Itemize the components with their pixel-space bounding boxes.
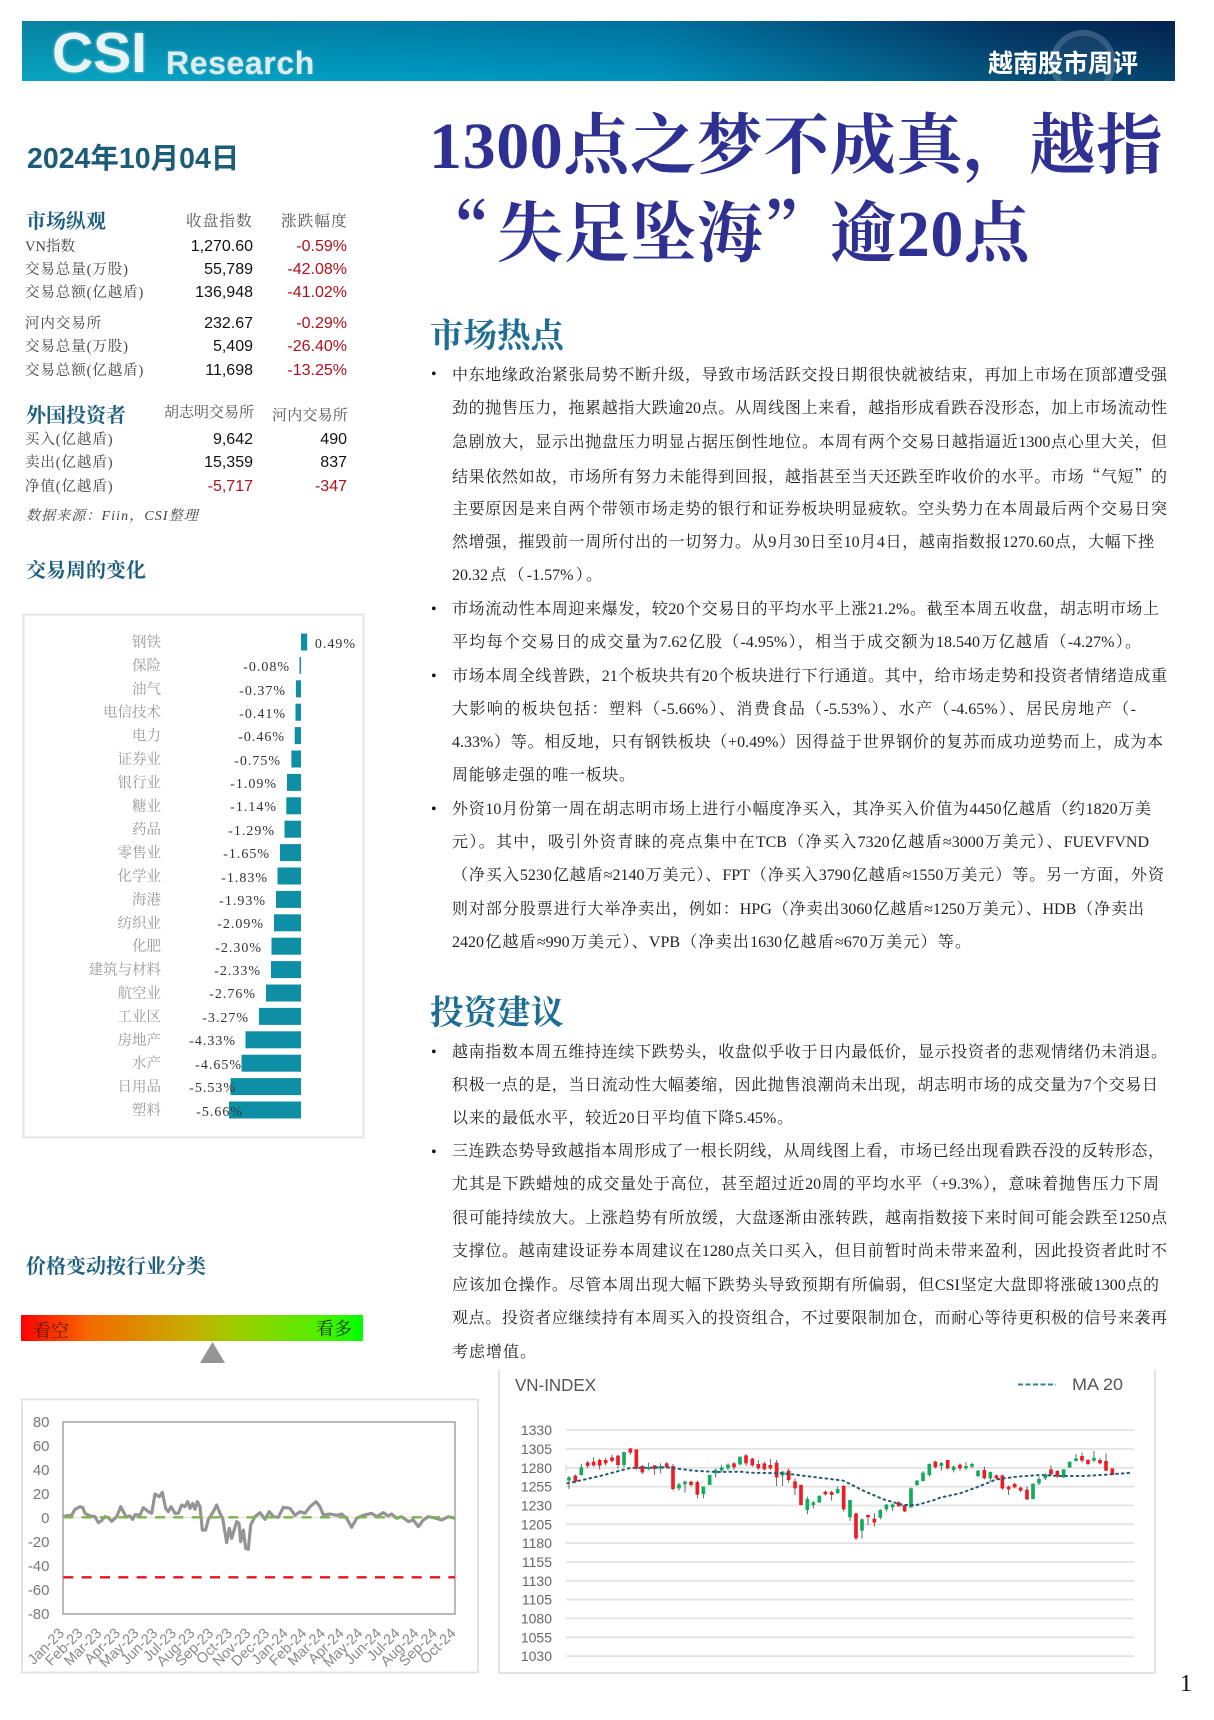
x axis month labels: Jan-24 xyxy=(249,1626,292,1668)
bullet 1: • xyxy=(431,366,437,383)
logo Research: Research xyxy=(166,45,315,81)
value labels: -2.30% xyxy=(215,941,262,956)
text block: investment advice: 三连跌态势导致越指本周形成了一根长阴线，从周线图上看，市场已经出现看跌吞没的反转形态， xyxy=(452,1143,1164,1160)
y axis labels: -40 xyxy=(28,1558,50,1575)
MA 20 line xyxy=(567,1467,1132,1505)
market overview table: VN指数 xyxy=(25,239,75,255)
text block: investment advice: 积极一点的是，当日流动性大幅萎缩，因此抛售浪潮尚未出现，胡志明市场的成交量为7个交易日 xyxy=(452,1077,1158,1094)
text block: market hot spots: 4.33%）等。相反地，只有钢铁板块（+0.49%）因得益于世界钢价的复苏而成功逆势而上，成为本 xyxy=(452,734,1163,751)
text block: market hot spots: 则对部分股票进行大举净卖出，例如：HPG（净卖出3060亿越盾≈1250万美元）、HDB（净卖出 xyxy=(452,901,1144,918)
text block: investment advice: 以来的最低水平，较近20日平均值下降5.45%。 xyxy=(452,1110,793,1127)
market overview table: -26.40% xyxy=(287,338,347,355)
y axis labels: 1155 xyxy=(522,1554,552,1570)
market overview table: -13.25% xyxy=(287,362,347,379)
sector labels: 零售业 xyxy=(118,842,161,863)
sector labels: 保险 xyxy=(132,654,161,675)
x axis month labels: Mar-24 xyxy=(285,1626,329,1669)
text block: market hot spots: 然增强，摧毁前一周所付出的一切努力。从9月30日至10月4日，越南指数报1270.60点，大幅下挫 xyxy=(452,534,1154,551)
text block: market hot spots: 市场本周全线普跌，21个板块共有20个板块进行下行通道。其中，给市场走势和投资者情绪造成重 xyxy=(452,668,1167,685)
y axis labels xyxy=(28,1414,50,1623)
text block: investment advice: 越南指数本周五维持连续下跌势头，收盘似乎收于日内最低价，显示投资者的悲观情绪仍未消退。 xyxy=(452,1044,1167,1061)
sector labels: 水产 xyxy=(132,1052,161,1073)
text block: market hot spots: 平均每个交易日的成交量为7.62亿股（-4.95%），相当于成交额为18.540万亿越盾（-4.27%）。 xyxy=(452,634,1141,651)
text block: investment advice: 支撑位。越南建设证券本周建议在1280点关口买入，但目前暂时尚未带来盈利，因此投资者此时不 xyxy=(452,1243,1167,1260)
heading: market overview: 市场纵观 xyxy=(26,205,106,234)
title line 2: “失足坠海”逾20点 xyxy=(424,180,1031,275)
sector labels: 油气 xyxy=(132,678,161,699)
x axis month labels: Aug-23 xyxy=(154,1626,198,1670)
bullet 3: • xyxy=(431,668,437,685)
text block: market hot spots: 主要原因是来自两个带领市场走势的银行和证券板块明显疲软。空头势力在本周最后两个交易日突 xyxy=(452,501,1167,518)
market overview table: 河内交易所 xyxy=(25,316,102,332)
y axis labels: -60 xyxy=(28,1582,50,1599)
market overview table: 交易总量(万股) xyxy=(25,262,129,278)
heading: price change by sector: 价格变动按行业分类 xyxy=(26,1250,206,1279)
x axis month labels: Jan-23 xyxy=(25,1626,68,1668)
sector labels: 药品 xyxy=(132,818,161,839)
sector labels: 电信技术 xyxy=(103,701,161,722)
market overview table: 9,642 xyxy=(213,431,253,448)
heading: market hot spots: 市场热点 xyxy=(430,308,564,357)
bars xyxy=(229,634,307,1118)
market overview table: 136,948 xyxy=(195,284,253,301)
value labels: -1.65% xyxy=(223,847,270,862)
sentiment gauge bar xyxy=(21,1315,363,1341)
y axis labels: 80 xyxy=(33,1414,50,1431)
text block: market hot spots: 市场流动性本周迎来爆发，较20个交易日的平均水平上涨21.2%。截至本周五收盘，胡志明市场上 xyxy=(452,601,1159,618)
y axis labels: 1305 xyxy=(521,1441,552,1457)
y axis labels: 1055 xyxy=(521,1629,552,1645)
market overview table: -0.59% xyxy=(296,238,347,255)
sector labels: 航空业 xyxy=(118,982,161,1003)
bullet 4: • xyxy=(431,801,437,818)
x axis month labels: May-23 xyxy=(97,1626,142,1671)
sector labels: 海港 xyxy=(132,888,161,909)
y axis labels: 40 xyxy=(33,1462,50,1479)
sector labels: 工业区 xyxy=(118,1005,161,1026)
x axis month labels: Sep-24 xyxy=(396,1626,441,1670)
y axis labels: 20 xyxy=(33,1486,50,1503)
market overview table: 837 xyxy=(320,454,347,471)
y axis labels: 1030 xyxy=(521,1648,552,1664)
x axis month labels: Nov-23 xyxy=(210,1626,254,1670)
market overview table: 净值(亿越盾) xyxy=(25,479,113,495)
market overview table: 15,359 xyxy=(204,454,253,471)
report name: 越南股市周评 xyxy=(988,44,1138,80)
value labels: -5.53% xyxy=(189,1081,236,1096)
text block: investment advice: 尤其是下跌蜡烛的成交量处于高位，甚至超过近20周的平均水平（+9.3%），意味着抛售压力下周 xyxy=(452,1176,1159,1193)
x axis month labels: Mar-23 xyxy=(61,1626,105,1669)
text block: market hot spots: 急剧放大，显示出抛盘压力明显占据压倒性地位。本周有两个交易日越指逼近1300点心里大关，但 xyxy=(452,434,1167,451)
market overview table: 490 xyxy=(320,431,347,448)
sector labels: 日用品 xyxy=(118,1076,161,1097)
text block: market hot spots: （净买入5230亿越盾≈2140万美元）、FPT（净买入3790亿越盾≈1550万美元）等。另一方面，外资 xyxy=(452,867,1164,884)
gridlines xyxy=(566,1430,1134,1656)
market overview table: 232.67 xyxy=(204,315,253,332)
market overview table: 55,789 xyxy=(204,261,253,278)
legend: MA 20: MA 20 xyxy=(1072,1375,1123,1394)
text block: investment advice: 观点。投资者应继续持有本周买入的投资组合，不过要限制加仓，而耐心等待更积极的信号来袭再 xyxy=(452,1310,1167,1327)
y axis labels: 0 xyxy=(41,1510,50,1527)
value labels: -4.33% xyxy=(189,1034,236,1049)
sector labels: 化肥 xyxy=(132,935,161,956)
y axis labels: -80 xyxy=(28,1606,50,1623)
bar chart: weekly sector change xyxy=(22,614,364,1138)
header banner xyxy=(22,21,1175,81)
x axis month labels: Sep-23 xyxy=(173,1626,217,1670)
sector labels: 银行业 xyxy=(118,771,161,792)
value labels: -0.41% xyxy=(239,707,286,722)
text block: investment advice: 应该加仓操作。尽管本周出现大幅下跌势头导致预期有所偏弱，但CSI坚定大盘即将涨破1300点的 xyxy=(452,1277,1159,1294)
x axis month labels: Oct-24 xyxy=(417,1626,460,1668)
y axis labels xyxy=(521,1422,552,1664)
market overview table: 交易总额(亿越盾) xyxy=(25,363,144,379)
value labels: -2.09% xyxy=(217,917,264,932)
y axis labels: 1180 xyxy=(522,1535,552,1551)
market overview table: -0.29% xyxy=(296,315,347,332)
text block: market hot spots: 中东地缘政治紧张局势不断升级，导致市场活跃交投日期很快就被结束，再加上市场在顶部遭受强 xyxy=(452,367,1167,384)
sector labels: 钢铁 xyxy=(132,631,161,652)
market overview table: 1,270.60 xyxy=(191,238,253,255)
y axis labels: 1205 xyxy=(521,1516,552,1532)
value labels: -1.09% xyxy=(230,777,277,792)
heading: investment advice: 投资建议 xyxy=(430,985,564,1034)
data source note: 数据来源：Fiin，CSI整理 xyxy=(26,509,199,524)
text block: market hot spots: 大影响的板块包括：塑料（-5.66%）、消费食品（-5.53%）、水产（-4.65%）、居民房地产（- xyxy=(452,701,1136,718)
text block: investment advice: 很可能持续放大。上涨趋势有所放缓，大盘逐渐由涨转跌，越南指数接下来时间可能会跌至1250点 xyxy=(452,1210,1167,1227)
market overview table: 卖出(亿越盾) xyxy=(25,455,113,471)
x axis month labels: Feb-23 xyxy=(43,1626,86,1669)
market overview table xyxy=(25,205,348,495)
x axis month labels: Apr-23 xyxy=(82,1626,124,1668)
market overview table: 河内交易所 xyxy=(272,408,348,424)
text block: market hot spots: 结果依然如故，市场所有努力未能得到回报，越指甚至当天还跌至昨收价的水平。市场“气短”的 xyxy=(452,464,1167,487)
market overview table: 交易总量(万股) xyxy=(25,339,129,355)
x axis month labels: May-24 xyxy=(321,1626,366,1671)
sector labels: 电力 xyxy=(132,725,161,746)
x axis month labels: Jul-24 xyxy=(364,1626,404,1665)
x axis month labels: Oct-23 xyxy=(194,1626,236,1668)
y axis labels: 1330 xyxy=(521,1422,552,1438)
text block: market hot spots: 劲的抛售压力，拖累越指大跌逾20点。从周线图上来看，越指形成看跌吞没形态，加上市场流动性 xyxy=(452,400,1167,417)
y axis labels: 60 xyxy=(33,1438,50,1455)
value labels: -0.75% xyxy=(234,754,281,769)
market overview table: 11,698 xyxy=(205,362,253,379)
x axis month labels: Dec-23 xyxy=(229,1626,273,1670)
heading: weekly change: 交易周的变化 xyxy=(26,554,146,583)
text block: market hot spots: 元）。其中，吸引外资青睐的亮点集中在TCB（净买入7320亿越盾≈3000万美元）、FUEVFVND xyxy=(452,834,1149,851)
sector labels: 房地产 xyxy=(118,1029,161,1050)
market overview table: 5,409 xyxy=(213,338,253,355)
value labels: -0.46% xyxy=(238,730,285,745)
sector labels: 塑料 xyxy=(132,1099,161,1120)
y axis labels: -20 xyxy=(28,1534,50,1551)
title line 1: 1300点之梦不成真，越指 xyxy=(429,92,1163,187)
sector labels: 纺织业 xyxy=(118,912,161,933)
sector labels: 证券业 xyxy=(118,748,161,769)
x axis month labels: Jun-24 xyxy=(342,1626,385,1668)
gauge pointer triangle xyxy=(200,1342,225,1363)
page number: 1 xyxy=(1180,1671,1192,1697)
market overview table: 涨跌幅度 xyxy=(281,213,348,230)
market overview table: 胡志明交易所 xyxy=(164,405,254,421)
bearish label: 看空 xyxy=(33,1317,69,1343)
x axis month labels: Jul-23 xyxy=(140,1626,180,1665)
sector labels: 糖业 xyxy=(132,795,161,816)
value labels: -5.66% xyxy=(196,1105,243,1120)
sector labels xyxy=(88,631,161,1120)
market overview table: -41.02% xyxy=(287,284,347,301)
bullet 1: • xyxy=(431,1044,437,1061)
y axis labels: 1080 xyxy=(521,1610,552,1626)
bullet 2: • xyxy=(431,1144,437,1161)
emblem xyxy=(1050,30,1116,96)
x axis month labels: Apr-24 xyxy=(306,1626,348,1668)
candlestick chart: VN-INDEX xyxy=(498,1370,1156,1674)
text block: market hot spots: 外资10月份第一周在胡志明市场上进行小幅度净买入，其净买入价值为4450亿越盾（约1820万美 xyxy=(452,801,1151,818)
value labels xyxy=(189,637,356,1120)
y axis labels: 1255 xyxy=(521,1479,552,1495)
value labels: -1.14% xyxy=(230,800,277,815)
value labels: -1.83% xyxy=(221,871,268,886)
date: 2024年10月04日 xyxy=(27,143,239,175)
y axis labels: 1230 xyxy=(521,1498,552,1514)
x axis month labels: Jun-23 xyxy=(118,1626,161,1668)
market overview table: 交易总额(亿越盾) xyxy=(25,285,144,301)
line chart: sentiment oscillator xyxy=(21,1398,479,1674)
y axis labels: 1105 xyxy=(522,1592,552,1608)
text block: market hot spots: 20.32点（-1.57%）。 xyxy=(452,567,602,584)
sector labels: 化学业 xyxy=(118,865,161,886)
market overview table: -5,717 xyxy=(208,478,253,495)
bullet 2: • xyxy=(431,601,437,618)
y axis labels: 1280 xyxy=(521,1460,552,1476)
y axis labels: 1130 xyxy=(522,1573,552,1589)
legend: MA 20 xyxy=(1018,1375,1123,1394)
bullish label: 看多 xyxy=(316,1315,352,1341)
x axis month labels: Feb-24 xyxy=(267,1626,310,1669)
candles xyxy=(566,1448,1132,1540)
heading: foreign investors: 外国投资者 xyxy=(26,399,126,428)
value labels: -4.65% xyxy=(195,1058,242,1073)
text block: market hot spots xyxy=(431,366,1167,951)
market overview table: -347 xyxy=(315,478,347,495)
market overview table: 收盘指数 xyxy=(186,213,253,230)
sector labels: 建筑与材料 xyxy=(88,959,161,980)
market overview table: 买入(亿越盾) xyxy=(25,432,113,448)
text block: market hot spots: 周能够走强的唯一板块。 xyxy=(452,767,635,784)
value labels: -2.76% xyxy=(209,987,256,1002)
value labels: -3.27% xyxy=(202,1011,249,1026)
x axis month labels xyxy=(25,1626,460,1671)
value labels: 0.49% xyxy=(315,637,356,652)
text block: investment advice xyxy=(431,1043,1167,1361)
threshold and oscillator lines xyxy=(63,1492,455,1577)
value labels: -0.37% xyxy=(239,684,286,699)
market overview table: -42.08% xyxy=(287,261,347,278)
text block: market hot spots: 2420亿越盾≈990万美元）、VPB（净卖出1630亿越盾≈670万美元）等。 xyxy=(452,934,971,951)
chart title: VN-INDEX xyxy=(515,1375,596,1395)
value labels: -0.08% xyxy=(243,660,290,675)
value labels: -2.33% xyxy=(214,964,261,979)
x axis month labels: Aug-24 xyxy=(378,1626,422,1670)
text block: investment advice: 考虑增值。 xyxy=(452,1344,536,1361)
value labels: -1.29% xyxy=(228,824,275,839)
value labels: -1.93% xyxy=(219,894,266,909)
